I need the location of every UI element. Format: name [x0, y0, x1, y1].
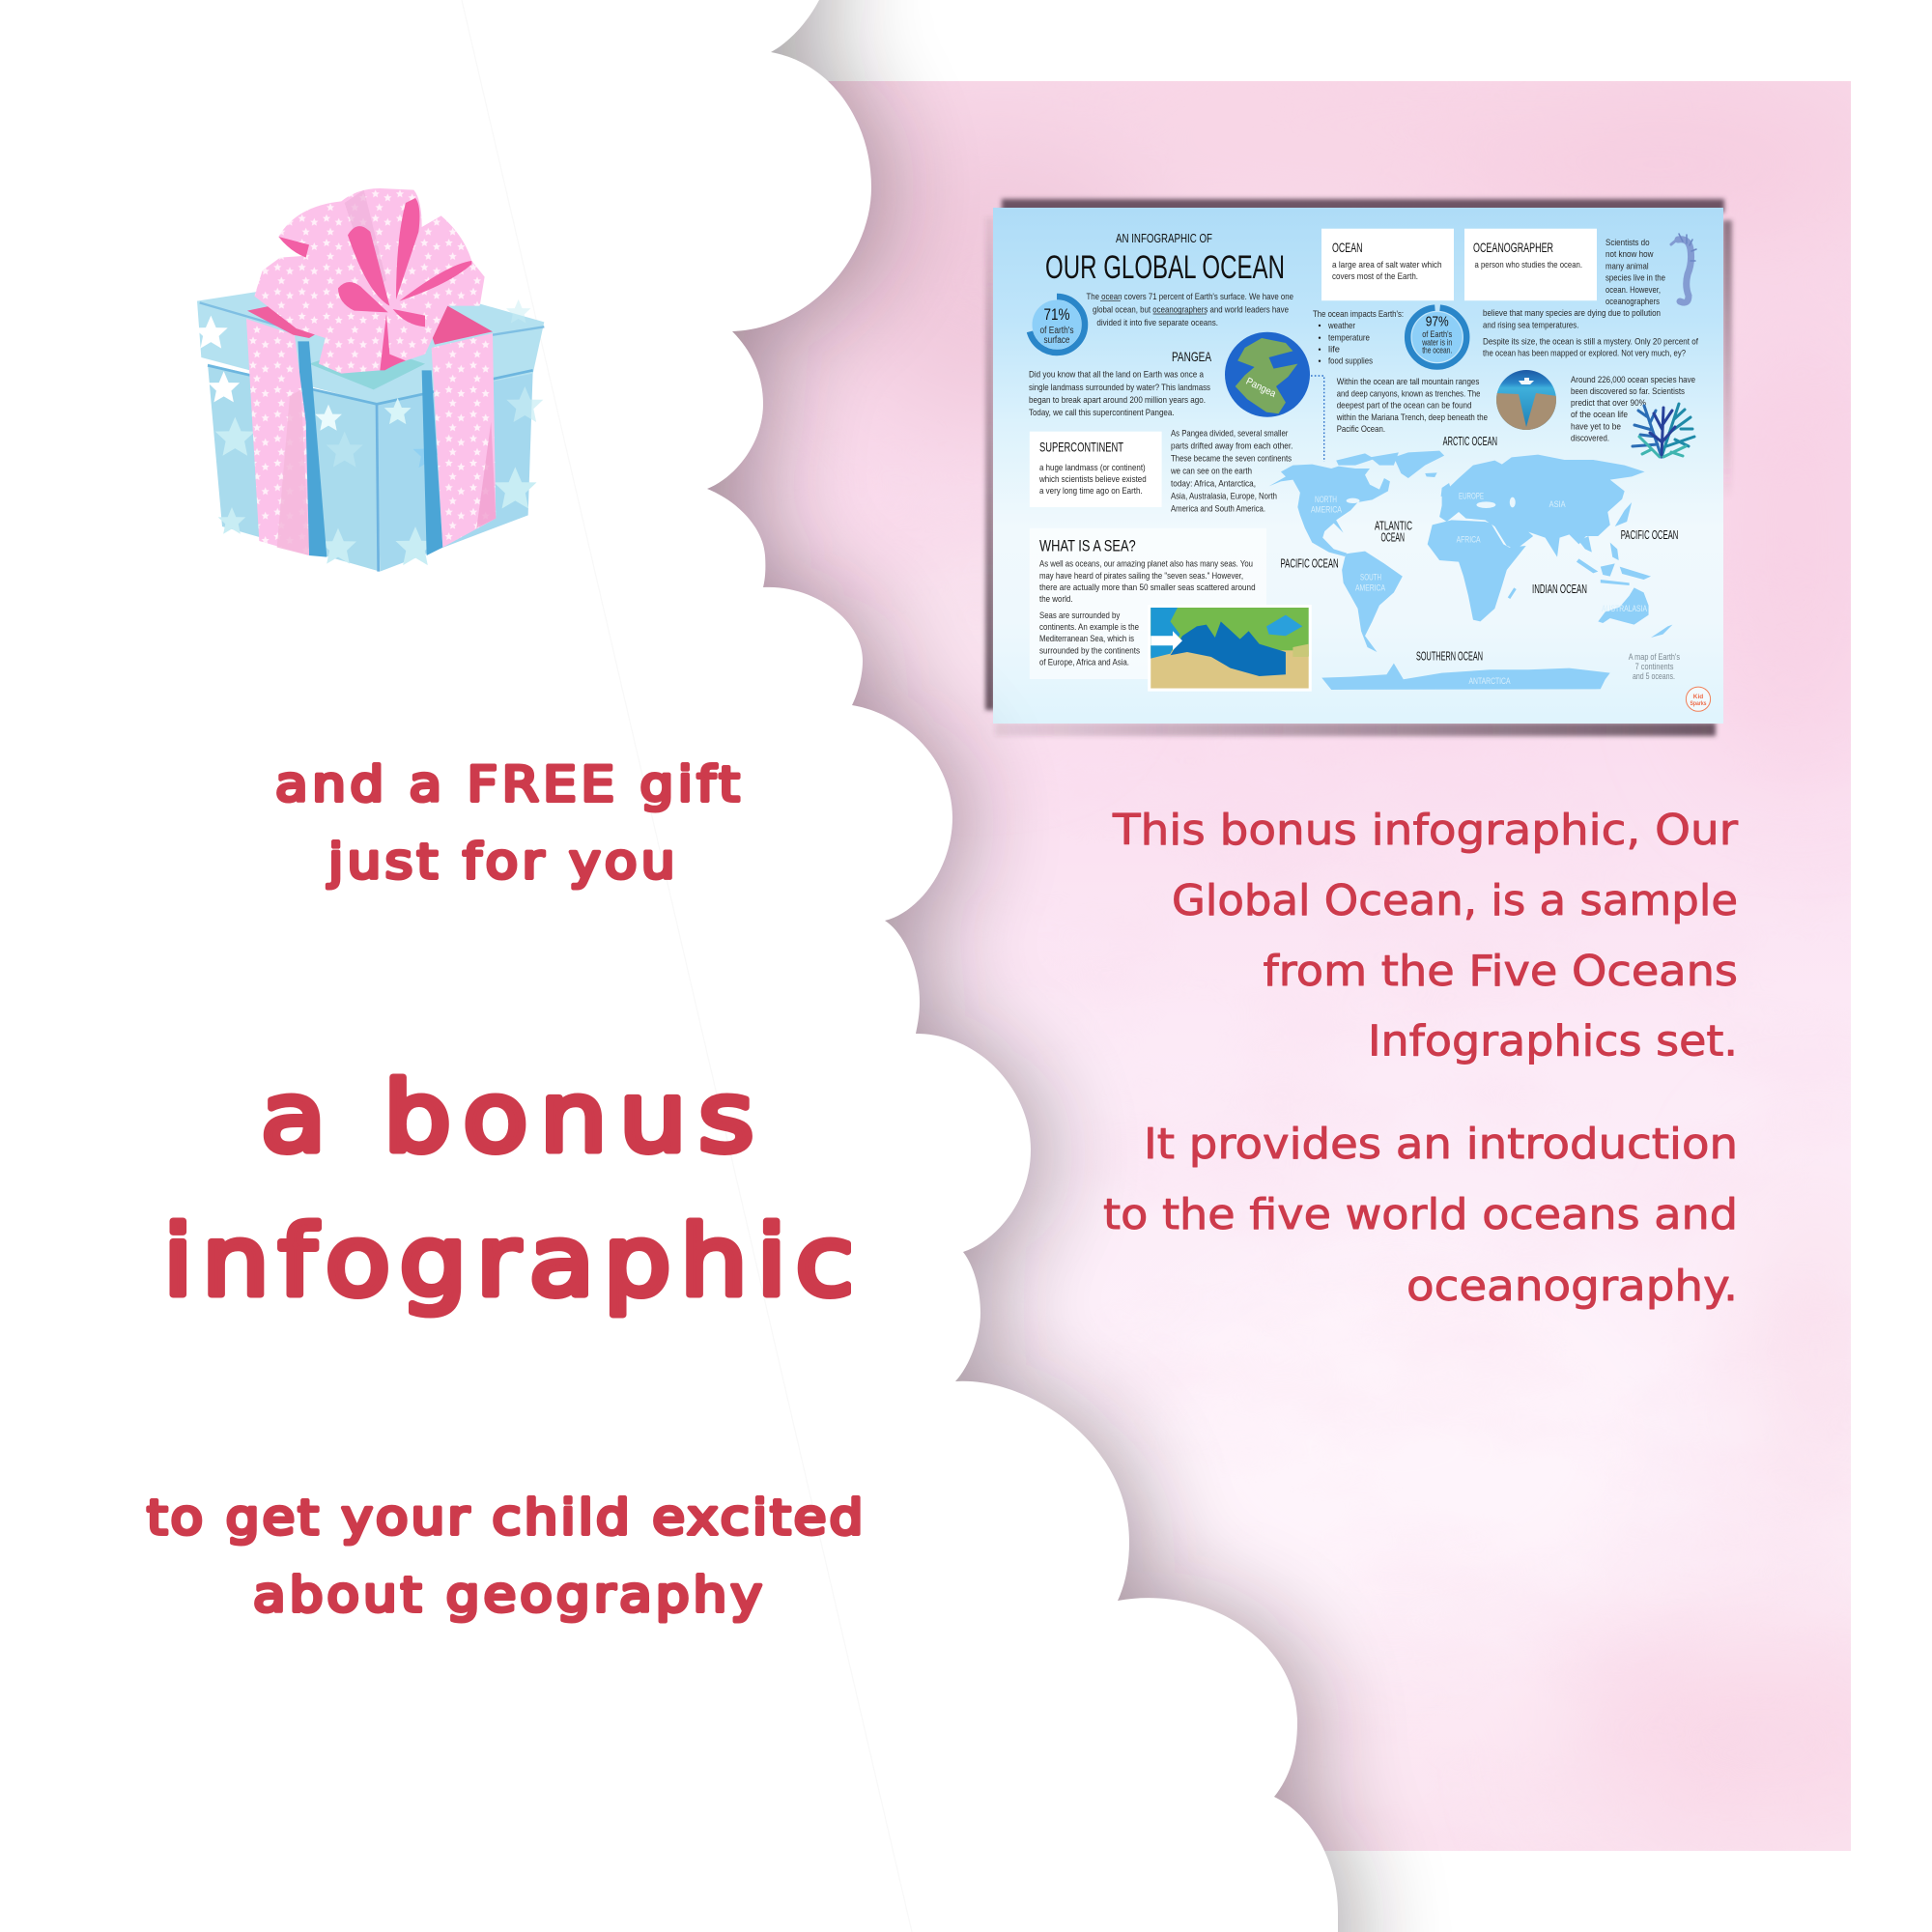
heading: a bonus infographic: infographic	[163, 1205, 854, 1318]
chart: 71 percent donut: of Earth's	[1039, 326, 1074, 336]
text: scientists column: ocean. However,	[1605, 285, 1661, 296]
map labels: continents: ASIA	[1549, 499, 1566, 510]
text: scientists column: many animal	[1605, 261, 1649, 271]
chart: 71 percent donut: 71%	[1043, 305, 1070, 324]
cloud edge shadow	[0, 0, 1351, 1932]
map caption: A map of Earth's	[1629, 652, 1680, 663]
logo: Kid Sparks: Kid	[1693, 694, 1703, 700]
text: bonus infographic description: to the five world oceans and	[1103, 1190, 1738, 1239]
map: Mediterranean Sea	[1148, 605, 1312, 692]
panel: Our Global Ocean infographic sheet	[993, 208, 1723, 724]
gift box body	[194, 273, 544, 572]
supercontinent definition panel: which scientists believe existed	[1038, 474, 1147, 485]
panel: oceanographer definition	[1464, 229, 1597, 300]
text: bonus infographic description	[1103, 806, 1739, 1311]
text: ocean intro	[1086, 292, 1293, 328]
supercontinent definition panel: a huge landmass (or continent)	[1039, 463, 1146, 473]
text: Pangea divided: These became the seven continents	[1171, 454, 1292, 465]
map labels: oceans	[1281, 434, 1678, 664]
text: species discovered: been discovered so far. Scientists	[1571, 386, 1685, 397]
text: scientists column: not know how	[1605, 249, 1654, 260]
logo: Kid Sparks: Sparks	[1690, 701, 1707, 707]
map: world continents	[1269, 451, 1672, 690]
text: species discovered: Around 226,000 ocean species have	[1571, 375, 1695, 385]
text: mountain ranges and trenches: Pacific Ocean.	[1337, 424, 1385, 435]
text: Pangea divided: Asia, Australasia, Europe, North	[1171, 492, 1277, 502]
map caption	[1629, 652, 1680, 682]
chart: 71 percent donut: surface	[1043, 335, 1070, 346]
infographic title	[1045, 231, 1285, 286]
map caption: and 5 oceans.	[1633, 671, 1675, 682]
icon: coral	[1633, 404, 1694, 457]
text: scientists column: oceanographers	[1605, 297, 1660, 307]
text: species discovered: of the ocean life	[1571, 410, 1628, 420]
panel: what is a sea: continents. An example is the	[1039, 622, 1139, 633]
text: bonus infographic description: Infographics set.	[1368, 1016, 1738, 1066]
text: species discovered: discovered.	[1571, 433, 1609, 443]
map labels: continents: AMERICA	[1311, 505, 1342, 516]
panel: what is a sea: the world.	[1039, 594, 1072, 605]
chart: 71 percent donut	[1029, 297, 1085, 353]
text: bonus infographic description: It provides an introduction	[1144, 1120, 1738, 1169]
text: ocean impacts list: temperature	[1328, 333, 1370, 344]
text: bonus infographic description: This bonus infographic, Our	[1112, 806, 1739, 855]
text: Pangea divided: parts drifted away from each other.	[1171, 441, 1293, 452]
text: to get your child excited: to get your child excited	[147, 1490, 863, 1546]
supercontinent definition panel	[1030, 432, 1162, 507]
panel: pink watercolour background	[707, 81, 1851, 1851]
map labels: oceans: OCEAN	[1381, 530, 1405, 545]
panel: what is a sea: Mediterranean Sea, which is	[1039, 634, 1134, 644]
text: species and mystery	[1483, 308, 1698, 359]
text: mountain ranges and trenches: deepest part of the ocean can be found	[1337, 401, 1472, 412]
icon: gift box	[194, 188, 544, 572]
map labels: oceans: PACIFIC OCEAN	[1621, 527, 1678, 542]
text: mountain ranges and trenches	[1336, 377, 1488, 435]
panel: what is a sea: of Europe, Africa and Asia.	[1039, 657, 1129, 668]
icon: Pangea globe	[1225, 332, 1310, 417]
panel: white scalloped cloud	[0, 0, 1338, 1932]
supercontinent definition panel: SUPERCONTINENT	[1039, 440, 1123, 455]
text: ocean intro: divided it into five separate oceans.	[1096, 318, 1218, 328]
text: species discovered: have yet to be	[1571, 421, 1621, 432]
panel: ocean definition	[1321, 229, 1454, 300]
panel: what is a sea: Seas are surrounded by	[1039, 611, 1120, 621]
icon: ocean trench	[1495, 370, 1557, 431]
gift bow	[247, 188, 493, 374]
panel: oceanographer definition: a person who studies the ocean.	[1474, 260, 1582, 270]
supercontinent definition panel: a very long time ago on Earth.	[1039, 486, 1143, 497]
text: species and mystery: believe that many species are dying due to pollution	[1483, 308, 1661, 319]
chart: 97 percent donut: water is in	[1421, 338, 1452, 349]
text: Pangea divided	[1170, 428, 1293, 515]
text: Pangea paragraph	[1029, 370, 1210, 418]
infographic title: OUR GLOBAL OCEAN	[1045, 249, 1285, 286]
text: Pangea paragraph: single landmass surrounded by water? This landmass	[1029, 383, 1210, 393]
map labels: continents: EUROPE	[1459, 492, 1484, 502]
panel: what is a sea	[1030, 528, 1266, 679]
text: and a FREE gift: just for you	[327, 834, 675, 890]
panel: what is a sea: may have heard of pirates sailing the "seven seas." However,	[1039, 571, 1243, 582]
text: ocean impacts list: weather	[1327, 321, 1355, 331]
text: Pangea paragraph: began to break apart around 200 million years ago.	[1029, 395, 1206, 406]
text: scientists column: Scientists do	[1605, 238, 1650, 248]
text: mountain ranges and trenches: and deep canyons, known as trenches. The	[1337, 389, 1480, 400]
panel: ocean definition: OCEAN	[1332, 240, 1362, 255]
dotted connector line	[1311, 376, 1324, 462]
map labels: continents: AFRICA	[1457, 535, 1481, 546]
infographic shadow	[985, 199, 1732, 736]
icon: Pangea globe: Pangea	[1244, 376, 1278, 400]
text: species discovered	[1571, 375, 1695, 443]
text: species and mystery: Despite its size, the ocean is still a mystery. Only 20 percent of	[1483, 337, 1698, 348]
panel: ocean definition: a large area of salt water which	[1332, 260, 1442, 270]
text: Pangea divided: America and South America.	[1171, 504, 1265, 515]
text: to get your child excited	[147, 1490, 863, 1623]
infographic title: AN INFOGRAPHIC OF	[1116, 231, 1212, 245]
icon: seahorse	[1671, 234, 1696, 302]
text: mountain ranges and trenches: within the Mariana Trench, deep beneath the	[1336, 412, 1488, 423]
text: ocean impacts list	[1313, 309, 1404, 367]
text: to get your child excited: about geography	[253, 1567, 762, 1623]
map labels: continents: NORTH	[1315, 495, 1337, 505]
chart: 97 percent donut: of Earth's	[1422, 329, 1452, 340]
chart: 97 percent donut: the ocean.	[1422, 346, 1452, 356]
text: Pangea divided: today: Africa, Antarctica,	[1171, 479, 1256, 490]
panel: oceanographer definition: OCEANOGRAPHER	[1473, 240, 1553, 255]
text: Pangea divided: As Pangea divided, several smaller	[1171, 428, 1288, 439]
chart: 97 percent donut	[1407, 307, 1466, 367]
text: ocean impacts list: life	[1328, 345, 1340, 355]
text: and a FREE gift	[275, 756, 740, 890]
map labels: oceans: INDIAN OCEAN	[1532, 582, 1587, 596]
panel: ocean definition: covers most of the Earth.	[1332, 271, 1418, 282]
map labels: continents: ANTARCTICA	[1468, 676, 1511, 687]
map labels: oceans: PACIFIC OCEAN	[1281, 555, 1339, 570]
heading: a bonus infographic: a bonus	[261, 1061, 753, 1174]
text: scientists column: species live in the	[1605, 273, 1665, 284]
map labels: continents	[1311, 492, 1647, 687]
map labels: oceans: SOUTHERN OCEAN	[1416, 649, 1483, 664]
logo: Kid Sparks	[1686, 687, 1711, 711]
text: ocean impacts list: food supplies	[1328, 356, 1373, 367]
map labels: oceans: ATLANTIC	[1375, 519, 1412, 533]
text: bonus infographic description: oceanography.	[1406, 1262, 1738, 1311]
text: Pangea paragraph: Today, we call this supercontinent Pangea.	[1029, 408, 1175, 418]
text: Pangea paragraph: Did you know that all the land on Earth was once a	[1029, 370, 1205, 381]
map labels: continents: AMERICA	[1355, 583, 1385, 594]
text: ocean intro: The ocean covers 71 percent of Earth's surface. We have one	[1086, 292, 1293, 302]
heading: Pangea: PANGEA	[1172, 349, 1211, 364]
chart: 97 percent donut: 97%	[1426, 314, 1449, 330]
text: species and mystery: and rising sea temperatures.	[1483, 320, 1578, 330]
map labels: continents: SOUTH	[1360, 573, 1381, 583]
text: species discovered: predict that over 90%	[1571, 398, 1646, 409]
panel: what is a sea: WHAT IS A SEA?	[1039, 537, 1136, 555]
heading: a bonus infographic	[163, 1061, 854, 1318]
panel: what is a sea: there are actually more than 50 smaller seas scattered around	[1039, 582, 1256, 593]
text: bonus infographic description: Global Ocean, is a sample	[1172, 876, 1738, 925]
text: bonus infographic description: from the Five Oceans	[1264, 947, 1738, 996]
text: and a FREE gift: and a FREE gift	[275, 756, 740, 812]
panel: what is a sea: surrounded by the continents	[1039, 645, 1140, 656]
map labels: oceans: ARCTIC OCEAN	[1443, 434, 1497, 448]
text: Pangea divided: we can see on the earth	[1170, 467, 1252, 477]
text: species and mystery: the ocean has been mapped or explored. Not very much, ey?	[1483, 349, 1686, 359]
gift box ribbons	[246, 319, 496, 557]
text: mountain ranges and trenches: Within the ocean are tall mountain ranges	[1337, 377, 1480, 387]
map caption: 7 continents	[1635, 662, 1674, 672]
text: ocean intro: global ocean, but oceanographers and world leaders have	[1093, 305, 1289, 316]
text: scientists column	[1605, 238, 1665, 307]
panel: what is a sea: As well as oceans, our amazing planet also has many seas. You	[1039, 559, 1253, 570]
map labels: continents: AUSTRALASIA	[1602, 604, 1647, 614]
text: ocean impacts list: The ocean impacts Earth's:	[1313, 309, 1404, 320]
